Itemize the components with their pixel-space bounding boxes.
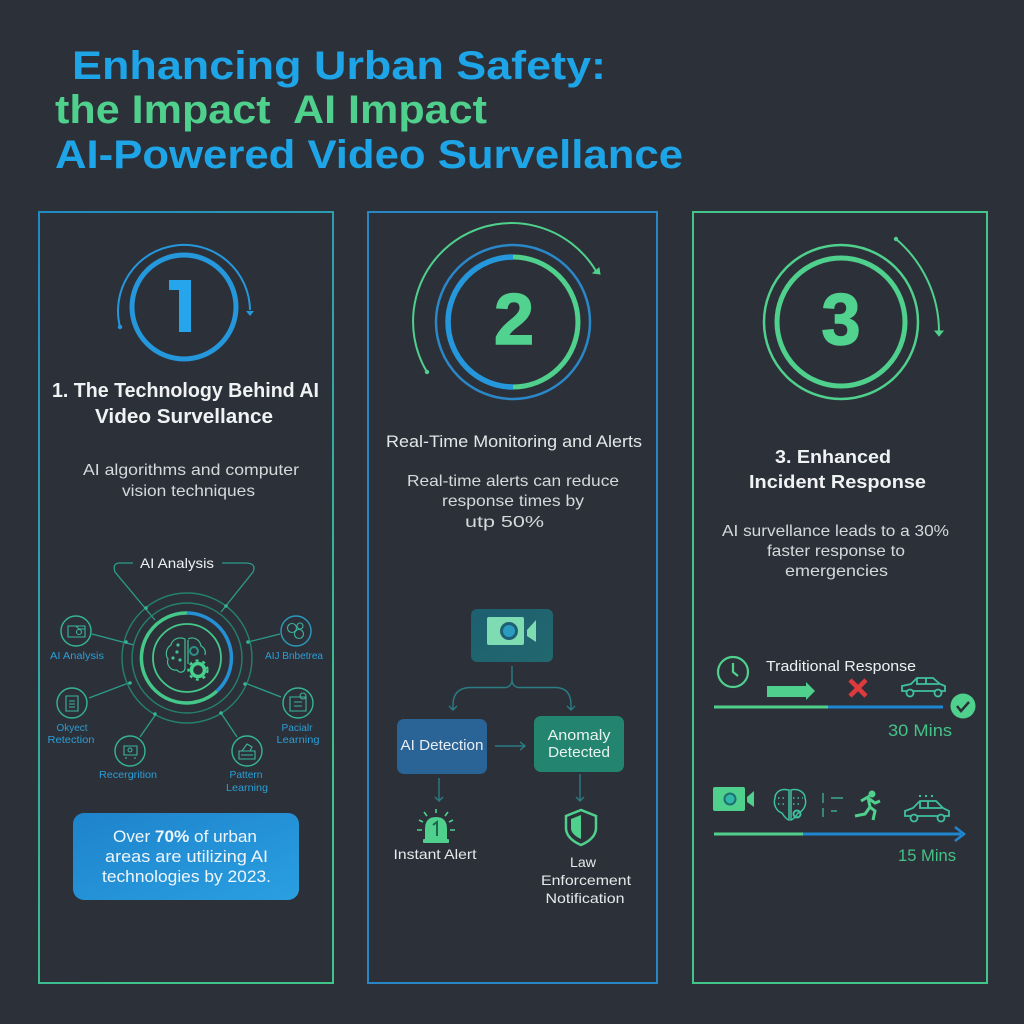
body text 3: AI survellance leads to a 30% (722, 523, 949, 540)
title: Enhancing Urban Safety: (72, 44, 606, 88)
number badge 2 (413, 223, 600, 399)
branch arrows (435, 666, 584, 801)
icon: runner (855, 790, 880, 820)
icon: alert siren (417, 809, 455, 843)
AI analysis radial diagram (48, 555, 323, 794)
law enforcement label: Enforcement (541, 872, 631, 888)
anomaly box: Detected (548, 745, 610, 761)
heading 1: Video Survellance (95, 406, 273, 428)
icon labels: Okyect (56, 722, 88, 734)
icon: clock (718, 657, 748, 687)
icon circles (57, 616, 313, 766)
icon: brain (774, 790, 806, 820)
traditional response timeline (714, 657, 976, 740)
icon: small arrows (823, 793, 843, 817)
body text 3: faster response to (767, 543, 905, 560)
body text 1: vision techniques (122, 483, 255, 500)
heading 1 (52, 380, 319, 428)
AI detection box (397, 719, 487, 774)
icon: camera (713, 787, 754, 811)
heading 3: 3. Enhanced (775, 446, 891, 467)
anomaly box (534, 716, 624, 772)
icon labels (48, 650, 323, 794)
ring nodes (124, 604, 250, 716)
heading 3: Incident Response (749, 471, 926, 492)
icon: red cross (850, 680, 866, 696)
icon: check (950, 694, 976, 718)
15 mins: 15 Mins (898, 846, 956, 865)
callout: 70 percent: Over 70% of urban (113, 828, 257, 846)
heading 1: 1. The Technology Behind AI (52, 380, 319, 402)
panel: real-time monitoring (368, 212, 657, 983)
timeline arrow (714, 827, 964, 841)
camera box (471, 609, 553, 662)
timeline bar (714, 706, 828, 708)
icon labels: Pacialr (282, 722, 313, 734)
body text 3 (722, 523, 949, 580)
law enforcement label: Notification (546, 890, 624, 906)
law enforcement label (541, 854, 631, 906)
body text 2 (407, 473, 619, 531)
body text 2: utp 50% (465, 514, 544, 531)
icon labels: Retection (48, 734, 95, 746)
icon: brain and gear (166, 638, 208, 680)
diagram label: AI Analysis (140, 555, 214, 571)
body text 2: response times by (442, 493, 584, 510)
number badge 1 (118, 245, 254, 359)
icon labels: Recergrition (99, 769, 157, 781)
flow diagram (394, 609, 631, 906)
title (55, 44, 683, 177)
body text 3: emergencies (785, 563, 888, 580)
anomaly box: Anomaly (548, 728, 611, 744)
title: AI-Powered Video Survellance (55, 133, 683, 177)
title: the Impact AI Impact (55, 88, 487, 132)
callout: 70 percent: areas are utilizing AI (105, 848, 268, 866)
icon: police car (905, 795, 949, 822)
icon: shield (566, 810, 596, 845)
law enforcement label: Law (570, 854, 597, 870)
number badge 2: 2 (494, 280, 534, 360)
icon labels: Learning (226, 782, 268, 794)
icon: car (902, 678, 945, 696)
instant alert label: Instant Alert (394, 846, 477, 862)
callout: 70 percent: technologies by 2023. (102, 868, 271, 886)
traditional label: Traditional Response (766, 659, 916, 675)
panel: incident response (693, 212, 987, 983)
body text 1: AI algorithms and computer (83, 462, 300, 479)
rings (122, 593, 252, 723)
icon labels: Learning (276, 734, 320, 746)
number badge 3: 3 (822, 280, 860, 360)
body text 1 (83, 462, 300, 500)
heading 2: Real-Time Monitoring and Alerts (386, 433, 642, 451)
icon labels: Pattern (230, 769, 263, 781)
heading 3 (749, 446, 926, 492)
30 mins: 30 Mins (888, 721, 952, 740)
panel: technology (39, 212, 333, 983)
number badge 3 (764, 237, 943, 399)
body text 2: Real-time alerts can reduce (407, 473, 619, 490)
arrow (767, 682, 815, 700)
callout: 70 percent (73, 813, 299, 900)
icon labels: AIJ Bnbetrea (265, 650, 323, 662)
icon glyphs (66, 623, 306, 759)
AI detection box: AI Detection (400, 738, 484, 754)
connector lines (89, 563, 281, 737)
icon labels: AI Analysis (50, 650, 104, 662)
AI response timeline (713, 787, 964, 865)
